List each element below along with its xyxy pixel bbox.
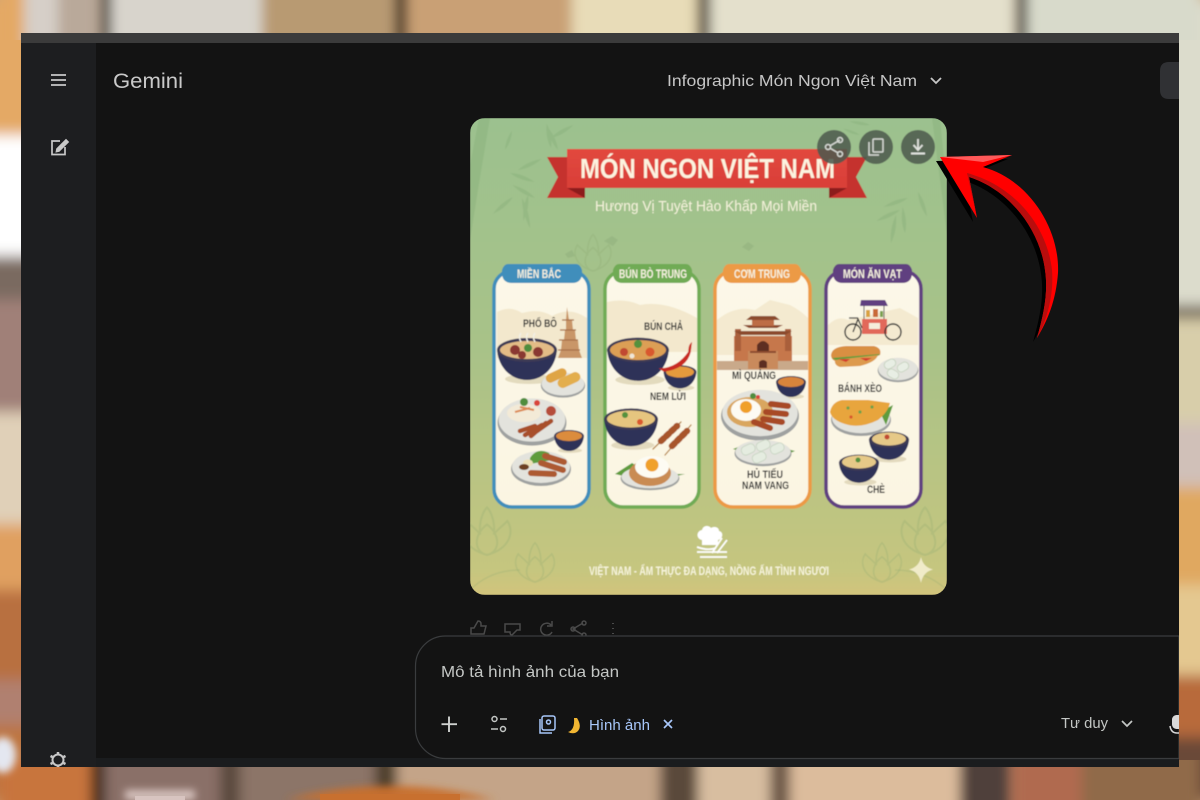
- illustration: che bowl: [839, 455, 879, 485]
- label: Phở Bò: PHỔ BÔ: [523, 317, 557, 330]
- image action: share: [817, 130, 851, 164]
- arrow pointing to download button: [936, 155, 1058, 342]
- prompt input box: [416, 636, 1179, 758]
- illustration: pho bowl: [497, 333, 557, 384]
- image action: copy: [859, 130, 893, 164]
- illustration: spring rolls: [541, 367, 585, 398]
- image action: download: [901, 130, 935, 164]
- illustration: chili bowl: [661, 344, 696, 391]
- infographic card: [464, 118, 948, 595]
- response actions: [471, 621, 613, 637]
- illustration: skewers: [653, 422, 691, 455]
- tab: Bún Bò Trung: BÚN BÒ TRUNG: [619, 266, 687, 281]
- bamboo decoration: [470, 118, 947, 243]
- tab: Cơm Trung: CƠM TRUNG: [734, 267, 790, 281]
- icon: hamburger menu: [51, 75, 66, 85]
- icon: new chat: [52, 140, 68, 154]
- icon: tune: [491, 716, 507, 732]
- label: Hủ Tiếu Nam Vang: NAM VANG: [742, 480, 789, 492]
- tab: Bún Bò Trung: [613, 264, 692, 283]
- label: Nem Lụi: NEM LỬI: [650, 390, 686, 403]
- tab: Món Ăn Vặt: MÓN ĂN VẠT: [843, 266, 903, 281]
- heading: title: MÓN NGON VIỆT NAM: [580, 153, 835, 184]
- conversation title: Infographic Món Ngon Việt Nam: [667, 73, 917, 90]
- label: Hủ Tiếu Nam Vang: [742, 468, 789, 492]
- mode selector: Tư duy: [1061, 715, 1108, 732]
- illustration: imperial citadel gate: [717, 316, 808, 370]
- panel: Món Ăn Vặt: [826, 264, 921, 507]
- label: Hủ Tiếu Nam Vang: HỦ TIẾU: [747, 468, 783, 481]
- tab: Miền Bắc: MIỀN BẮC: [517, 266, 561, 281]
- illustration: rice plate: [498, 398, 566, 446]
- illustration: street food cart: [845, 300, 901, 340]
- tab: Món Ăn Vặt: [833, 264, 912, 283]
- mode selector: [1061, 715, 1132, 732]
- illustration: pagoda: [558, 307, 582, 358]
- top-right button: [1160, 62, 1179, 99]
- tool label: Hình ảnh: [589, 717, 650, 734]
- illustration: banh xeo: [830, 400, 893, 436]
- illustration: cutlet plate: [511, 451, 571, 486]
- icon: microphone: [1170, 715, 1179, 733]
- tab: Cơm Trung: [723, 264, 801, 283]
- illustration: soup bowl: [869, 432, 909, 462]
- illustration: soup bowl: [604, 408, 658, 450]
- icon: sparkle: [909, 557, 933, 583]
- placeholder text: Mô tả hình ảnh của bạn: [441, 664, 619, 681]
- panel: Bún Bò Trung: [604, 264, 699, 507]
- illustration: noodle bowl: [607, 338, 669, 385]
- label: Bún Chả: BÚN CHẢ: [644, 320, 683, 333]
- icon: banana: [568, 718, 580, 733]
- illustration: banh mi: [831, 346, 880, 367]
- label: Chè: CHÈ: [867, 483, 885, 496]
- subtitle: Hương Vị Tuyệt Hảo Khấp Mọi Miền: [595, 198, 817, 215]
- lotus decoration: [464, 235, 948, 590]
- icon: settings: [50, 752, 66, 768]
- illustration: small bowl: [776, 376, 806, 399]
- illustration: rolls plate: [878, 358, 918, 382]
- icon: plus: [442, 716, 457, 732]
- illustration: fried egg rice: [615, 456, 685, 490]
- tab: Miền Bắc: [502, 264, 582, 283]
- illustration: spring rolls plate: [733, 438, 795, 466]
- icon: chef hat with chopsticks: [697, 526, 727, 557]
- app name: Gemini: Gemini: [113, 70, 183, 93]
- label: Mì Quảng: MÌ QUẢNG: [732, 369, 776, 382]
- title ribbon: [547, 149, 867, 198]
- panel: Cơm Trung: [715, 264, 810, 507]
- illustration: small bowl: [554, 430, 584, 453]
- illustration: broken rice plate: [721, 390, 799, 441]
- panel: Miền Bắc: [494, 264, 589, 507]
- icon: image tool: [540, 716, 555, 733]
- footer tagline: VIỆT NAM - ẨM THỰC ĐA DẠNG, NỒNG ẤM TÌNH NGƯƠI: [589, 565, 829, 578]
- icon: close: [664, 720, 672, 728]
- label: Bánh Xèo: BÁNH XÈO: [838, 382, 882, 395]
